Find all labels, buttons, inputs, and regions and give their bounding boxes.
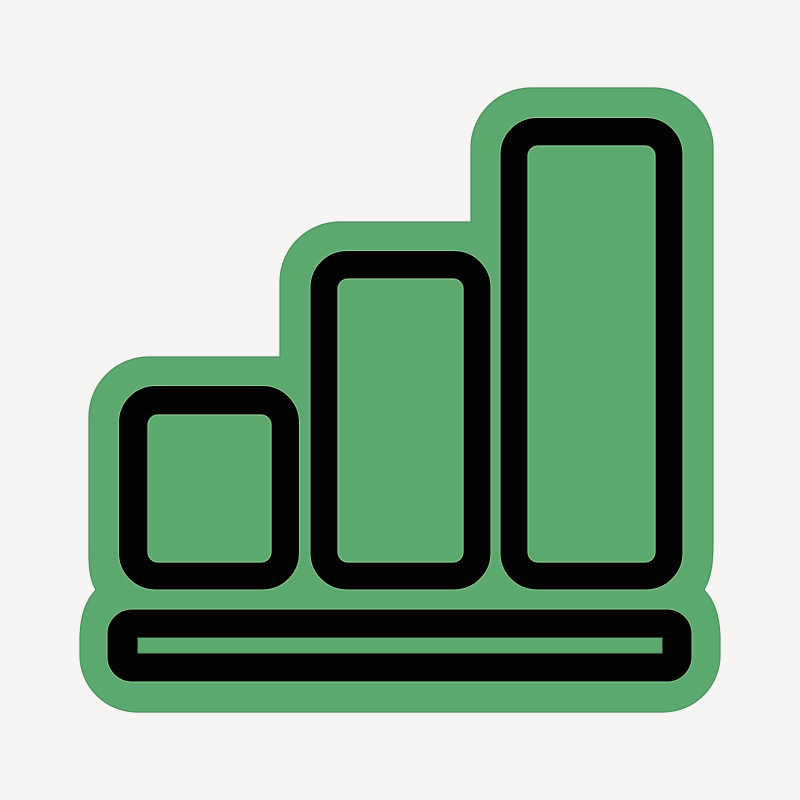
- green sticker backing: [80, 88, 720, 712]
- baseline bar: [107, 609, 692, 682]
- medium bar: [310, 250, 491, 590]
- tall bar: [500, 118, 683, 590]
- small bar: [118, 386, 300, 590]
